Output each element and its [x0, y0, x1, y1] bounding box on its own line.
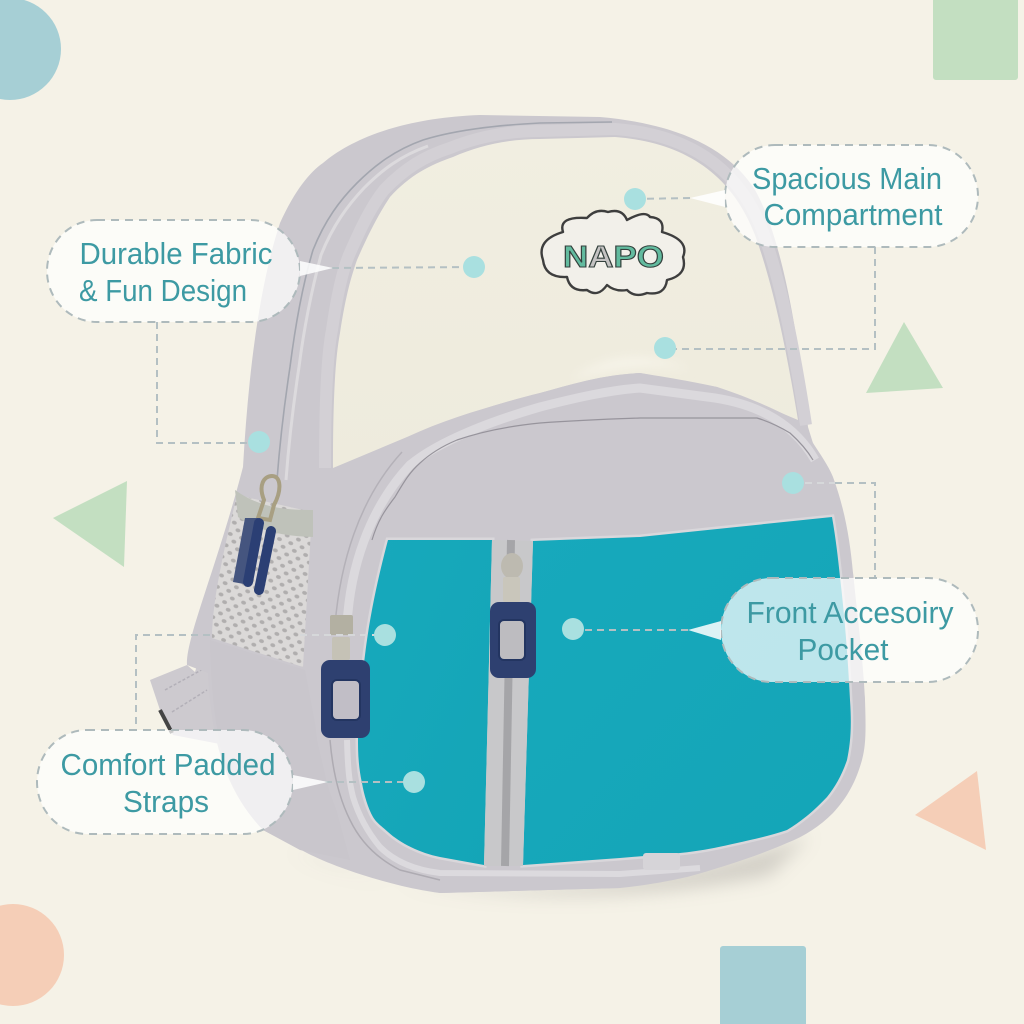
- callout: comfort padded straps: [37, 730, 328, 834]
- callout: front accessory pocket: Pocket: [798, 632, 889, 667]
- callout: spacious main compartment: Compartment: [764, 197, 943, 232]
- left body rim lines: [347, 740, 700, 874]
- callout: comfort padded straps: Comfort Padded: [60, 747, 276, 782]
- callout: spacious main compartment: Spacious Main: [752, 161, 942, 196]
- centre zipper pull: [490, 553, 536, 678]
- callout: front accessory pocket: Front Accesoiry: [746, 595, 954, 630]
- callout: comfort padded straps: Straps: [123, 784, 209, 819]
- callout: spacious main compartment: [690, 145, 978, 247]
- main zipper trim: [325, 129, 806, 468]
- mesh pocket zipper pulls: [233, 476, 279, 590]
- bottom loop: [643, 853, 680, 870]
- ground shadow: [290, 835, 810, 895]
- connector lines: [136, 198, 875, 782]
- cream main panel: [333, 137, 798, 468]
- backpack illustration: [150, 115, 866, 895]
- cream crease: [570, 358, 690, 380]
- side mesh pocket: [212, 495, 312, 667]
- pocket seam line: [372, 418, 813, 540]
- logo: NAPO: [563, 239, 664, 274]
- callout: front accessory pocket: [688, 578, 978, 682]
- teal panels: [358, 540, 492, 865]
- callout: durable fabric: & Fun Design: [79, 273, 247, 308]
- callout: durable fabric: Durable Fabric: [80, 236, 272, 271]
- front pocket: [315, 373, 866, 893]
- centre zipper: [484, 540, 533, 866]
- side zipper pull: [321, 615, 370, 738]
- side of bag: [187, 115, 865, 893]
- lower side panel: [210, 640, 350, 860]
- marker dots: [248, 188, 804, 793]
- shoulder strap: [150, 640, 225, 745]
- logo: [542, 211, 684, 295]
- callout: durable fabric: [47, 220, 333, 322]
- pocket zipper tape: [347, 388, 815, 625]
